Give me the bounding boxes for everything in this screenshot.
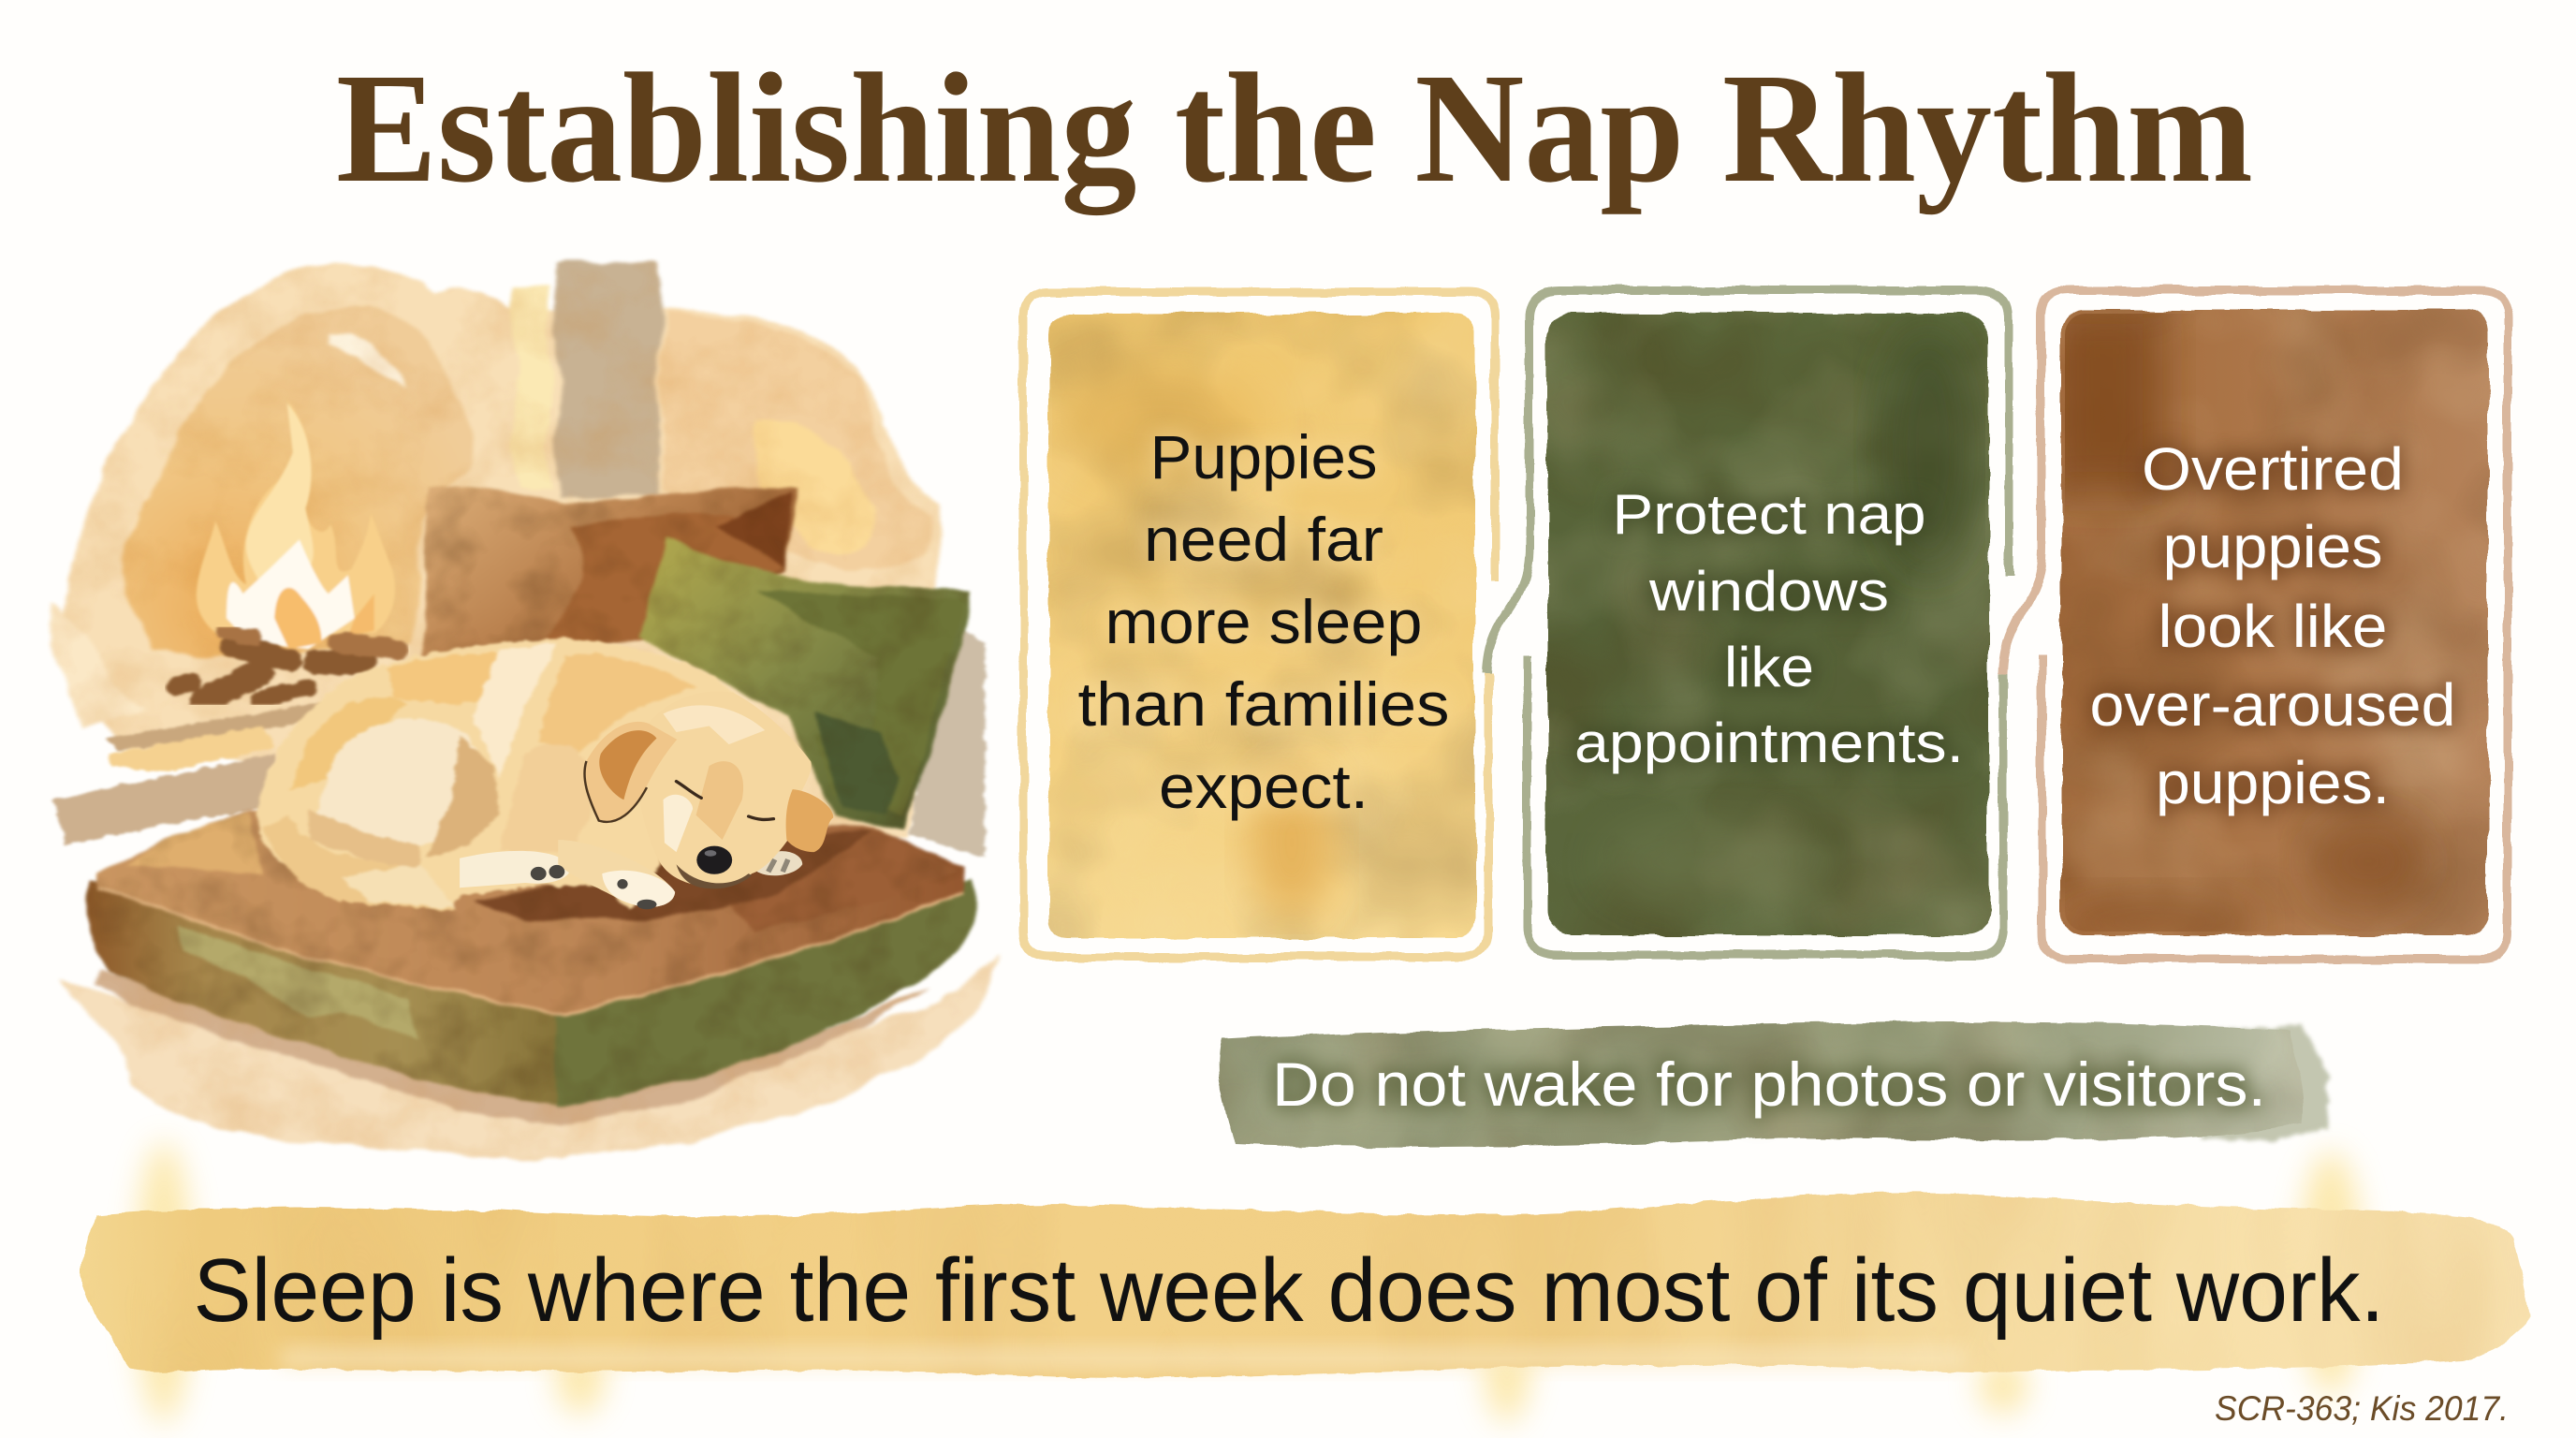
yellow card text: Puppies [1149, 422, 1378, 492]
logs [176, 631, 397, 701]
background wash [51, 261, 945, 840]
cushion [88, 810, 974, 1108]
brown card text: puppies. [2156, 749, 2390, 816]
banner lighter lower edge [281, 1348, 1966, 1369]
banner wash [81, 1193, 2529, 1377]
source citation: SCR-363; Kis 2017. [2215, 1389, 2509, 1428]
title: Establishing the Nap Rhythm [336, 41, 2253, 215]
brown card text: over-aroused [2089, 671, 2456, 739]
panel: yellow card [1023, 292, 1495, 957]
brown card text: look like [2159, 593, 2387, 660]
green card text: like [1724, 636, 1814, 698]
green card text: Protect nap [1612, 483, 1926, 546]
cushion piping [98, 889, 962, 1015]
puppy [257, 638, 833, 911]
brown fill [2050, 304, 2488, 950]
callout wash [1219, 1022, 2331, 1147]
brown pillow [420, 486, 798, 658]
banner: key takeaway [81, 1142, 2529, 1423]
green card text: appointments. [1574, 712, 1964, 774]
brown card text: Overtired [2142, 435, 2404, 503]
green fill [1547, 313, 1989, 935]
green frame [1486, 290, 2009, 955]
yellow card text: need far [1144, 505, 1383, 574]
puppy front legs [460, 840, 802, 909]
callout text: Do not wake for photos or visitors. [1272, 1049, 2266, 1119]
green card text: windows [1648, 560, 1889, 623]
yellow frame [1023, 292, 1495, 957]
brown card text [2089, 435, 2456, 816]
cushion top [95, 810, 965, 1015]
illustration: sleeping puppy by the fire [51, 261, 998, 1158]
brown card text: puppies [2162, 513, 2383, 580]
cushion right side [555, 880, 974, 1108]
cushion left side [88, 880, 564, 1108]
yellow card text: more sleep [1105, 587, 1423, 656]
puppy body [257, 638, 736, 911]
floor band [52, 618, 985, 858]
flame [197, 400, 395, 649]
yellow card text: than families [1078, 669, 1449, 739]
yellow card text: expect. [1159, 752, 1368, 821]
yellow card text [1078, 422, 1449, 821]
puppy ears [584, 722, 833, 852]
puppy head [637, 691, 812, 888]
panel: green card [1486, 290, 2009, 955]
green card text [1574, 483, 1964, 774]
callout: do not wake [1219, 1022, 2331, 1147]
panel: brown card [2003, 290, 2508, 959]
banner glow spots [136, 1142, 2363, 1423]
brown frame [2003, 290, 2508, 959]
cushion shadow [59, 957, 998, 1158]
banner text: Sleep is where the first week does most of its quiet work. [193, 1240, 2385, 1341]
green pillow [637, 538, 972, 830]
yellow fill [1048, 314, 1475, 938]
